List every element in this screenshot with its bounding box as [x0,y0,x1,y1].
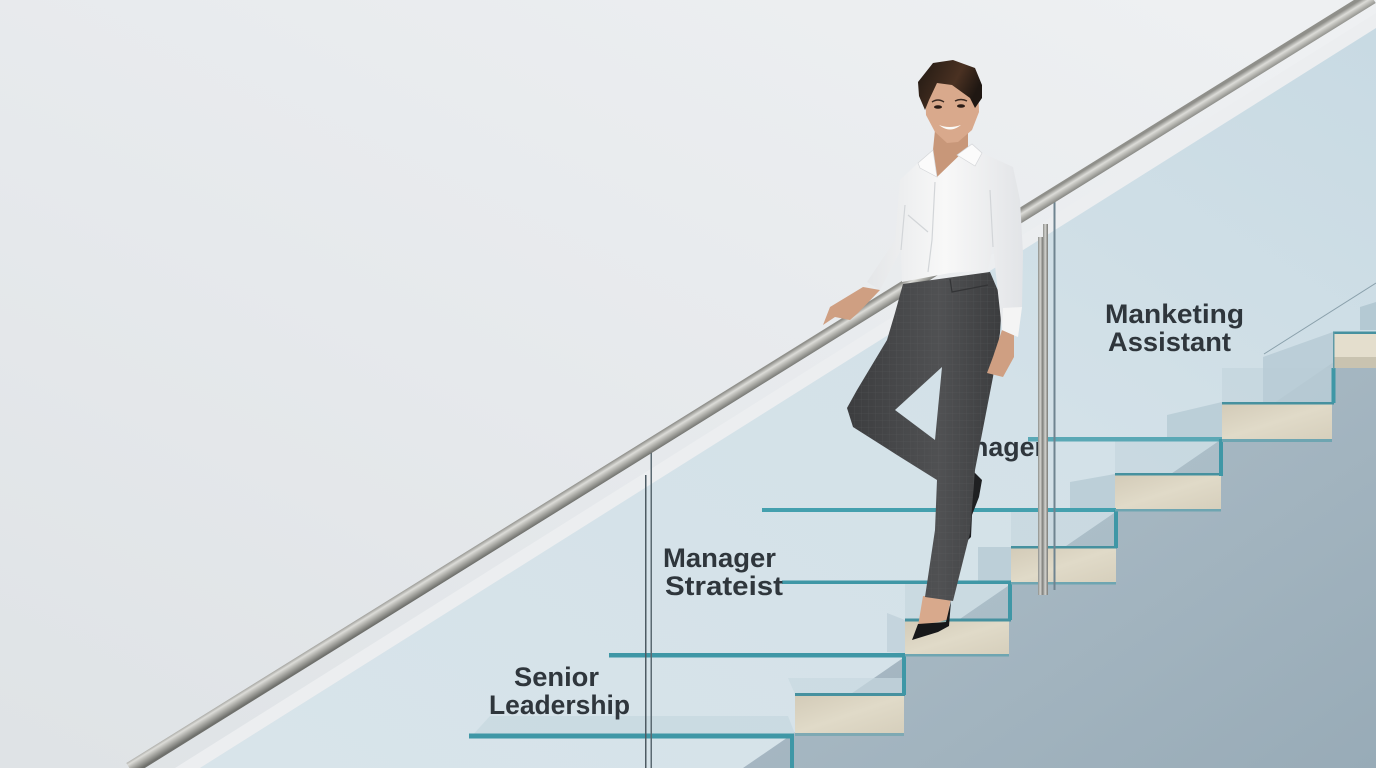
shoe [912,601,951,640]
label: Manketing Assistant: Manketing [1105,299,1244,329]
label: partly hidden Manager: nager [972,432,1045,462]
label: Manager Strateist: Strateist [665,571,783,601]
right hand [987,330,1014,377]
shaded underside of staircase [743,333,1376,768]
step 3: glass, tread and edges [782,510,1117,620]
label: Manager Strateist: Manager [663,543,776,573]
label: Manketing Assistant [1105,299,1244,357]
trousers [847,272,1002,601]
neck [933,130,968,177]
collar [918,144,982,177]
eyes, brows and smile [932,100,967,130]
label: Senior Leadership: Senior [514,662,599,692]
step 4: glass, tread and edges [762,439,1222,548]
back leg and heel [965,470,982,543]
glass posts: upper [1038,200,1056,595]
staircase steps [469,283,1376,768]
step 2: glass, tread and edges [609,582,1011,695]
front foot [918,596,951,626]
label: Manketing Assistant: Assistant [1108,327,1231,357]
step 1: glass, tread and edges [469,678,905,768]
step 5: glass, tread and edges [1028,368,1334,476]
person: woman on stairs [823,60,1023,640]
glass posts: lower [645,452,652,768]
hair [918,60,982,110]
label: Senior Leadership [489,662,630,720]
face [925,80,979,143]
step 6: glass, tread and edges [1263,283,1376,403]
label: Manager Strateist [663,543,783,601]
left hand on rail [823,287,880,325]
label: Senior Leadership: Leadership [489,690,630,720]
shirt [867,147,1023,337]
